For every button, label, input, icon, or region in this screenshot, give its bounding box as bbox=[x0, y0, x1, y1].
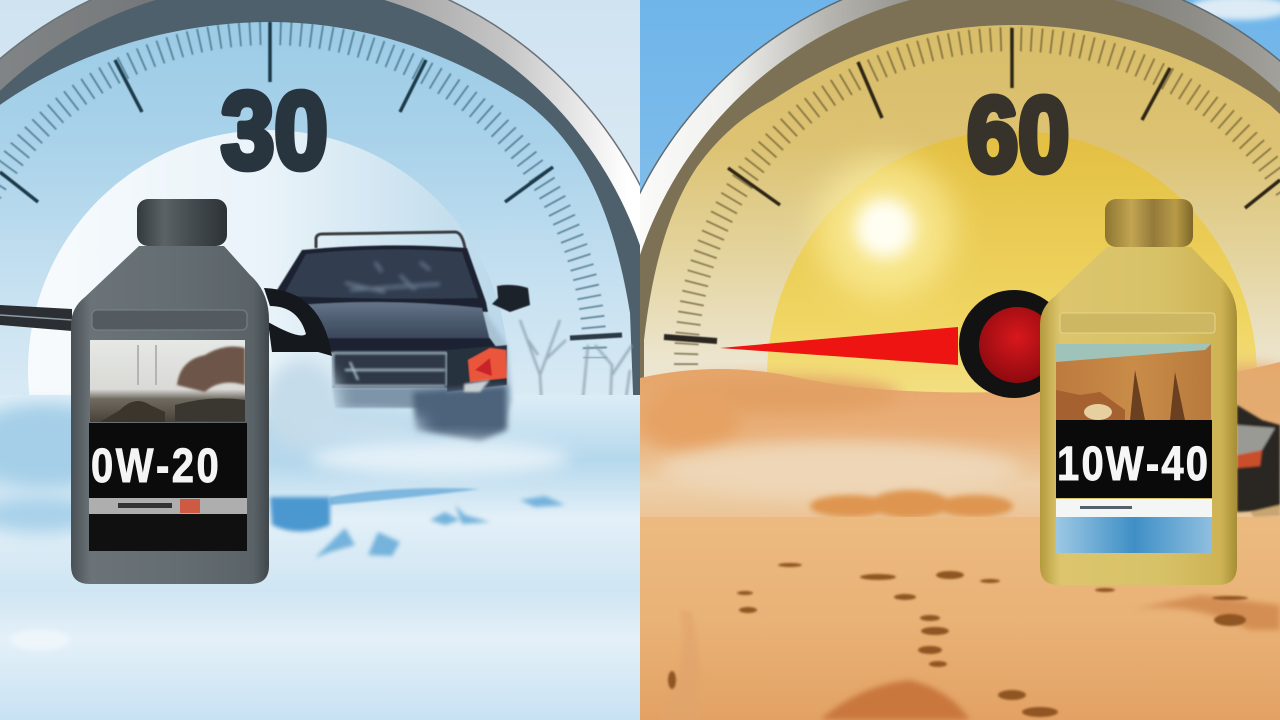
snow spray bbox=[264, 360, 570, 476]
dust cloud bbox=[810, 490, 1013, 518]
gauge bezel: summer bbox=[640, 0, 1280, 378]
white arch window bbox=[28, 130, 506, 395]
panel: winter bbox=[0, 0, 686, 720]
bottle label bbox=[1056, 344, 1212, 553]
desert sand bbox=[640, 517, 1280, 720]
snow ground bbox=[0, 395, 640, 720]
grade text 0W-20: 0W-20 bbox=[91, 440, 221, 493]
car: dark SUV in snow bbox=[277, 232, 530, 442]
needle hub bbox=[959, 290, 1049, 398]
bottle: 10W-40 bbox=[1040, 199, 1237, 585]
summer sky bbox=[640, 0, 1280, 191]
number 30: 30 bbox=[221, 70, 328, 191]
gauge needle: red bbox=[720, 327, 958, 365]
number 60: 60 bbox=[967, 76, 1069, 194]
winter sky bbox=[0, 0, 640, 183]
bottle label bbox=[89, 340, 247, 551]
sun arch window bbox=[767, 131, 1257, 392]
gauge ticks: winter bbox=[0, 22, 622, 358]
desert dunes bbox=[640, 362, 1280, 525]
bottle body bbox=[71, 246, 269, 584]
bottle cap bbox=[1105, 199, 1193, 247]
footprints bbox=[668, 563, 1248, 717]
gauge needle stub: winter bbox=[0, 288, 332, 356]
panel: summer bbox=[596, 0, 1280, 720]
grade text 10W-40: 10W-40 bbox=[1057, 438, 1210, 491]
bottle cap bbox=[137, 199, 227, 246]
bare trees bbox=[518, 319, 634, 395]
gauge bezel: winter bbox=[0, 0, 640, 395]
car: desert bbox=[1237, 405, 1280, 517]
bottle body bbox=[1040, 247, 1237, 585]
bottle: 0W-20 bbox=[71, 199, 269, 584]
sun bbox=[815, 158, 955, 298]
gauge ticks: summer bbox=[664, 28, 1280, 365]
